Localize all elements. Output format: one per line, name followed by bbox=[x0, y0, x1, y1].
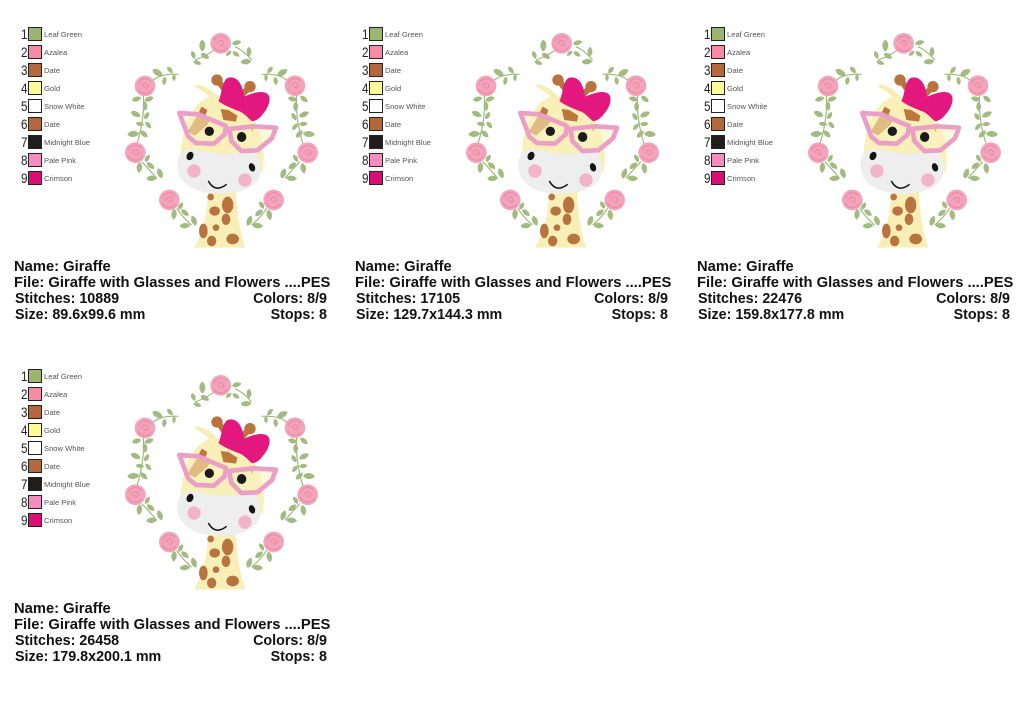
colour legend 2: 5 bbox=[362, 98, 369, 114]
design details 2: Stitches: 17105 bbox=[356, 291, 460, 307]
giraffe embroidery 4 bbox=[125, 375, 318, 590]
colour legend 2: 9 bbox=[362, 170, 369, 186]
design details 2: Name: Giraffe bbox=[355, 259, 452, 275]
colour legend 1: 4 bbox=[21, 80, 28, 96]
design details 4: Stops: 8 bbox=[271, 649, 327, 665]
colour legend 2: Date bbox=[385, 66, 401, 75]
colour legend 4: Leaf Green bbox=[44, 372, 82, 381]
colour legend 4: 5 bbox=[21, 440, 28, 456]
colour legend 2: Snow White bbox=[385, 102, 426, 111]
colour legend 1: Date bbox=[44, 66, 60, 75]
design details 1: File: Giraffe with Glasses and Flowers ....PES bbox=[14, 275, 331, 291]
panel: design 4 bbox=[14, 368, 331, 665]
colour legend 1 bbox=[21, 26, 90, 186]
colour legend 3: 4 bbox=[704, 80, 711, 96]
colour legend 1: Gold bbox=[44, 84, 60, 93]
colour legend 2: Crimson bbox=[385, 174, 413, 183]
colour legend 4: 2 bbox=[21, 386, 28, 402]
colour legend 4: Azalea bbox=[44, 390, 68, 399]
design details 4 bbox=[14, 601, 331, 665]
colour legend 3: 7 bbox=[704, 134, 711, 150]
design details 3: Colors: 8/9 bbox=[936, 291, 1010, 307]
colour legend 2: Date bbox=[385, 120, 401, 129]
design details 3: Size: 159.8x177.8 mm bbox=[698, 307, 844, 323]
design details 1: Stops: 8 bbox=[271, 307, 327, 323]
colour legend 4: 1 bbox=[21, 368, 28, 384]
colour legend 1: 5 bbox=[21, 98, 28, 114]
colour legend 1: Leaf Green bbox=[44, 30, 82, 39]
design details 2: Stops: 8 bbox=[612, 307, 668, 323]
colour legend 3: Pale Pink bbox=[727, 156, 759, 165]
colour legend 2: Azalea bbox=[385, 48, 409, 57]
design details 4: Stitches: 26458 bbox=[15, 633, 119, 649]
panel: design 2 bbox=[355, 26, 672, 323]
colour legend 2: Leaf Green bbox=[385, 30, 423, 39]
design details 1: Name: Giraffe bbox=[14, 259, 111, 275]
colour legend 3: Snow White bbox=[727, 102, 768, 111]
colour legend 4: Date bbox=[44, 462, 60, 471]
design details 1: Colors: 8/9 bbox=[253, 291, 327, 307]
panel: design 3 bbox=[697, 26, 1014, 323]
design details 4: Name: Giraffe bbox=[14, 601, 111, 617]
colour legend 3: 9 bbox=[704, 170, 711, 186]
colour legend 1: 3 bbox=[21, 62, 28, 78]
colour legend 1: Date bbox=[44, 120, 60, 129]
design details 3: File: Giraffe with Glasses and Flowers ....PES bbox=[697, 275, 1014, 291]
design details 2: Colors: 8/9 bbox=[594, 291, 668, 307]
colour legend 4: Snow White bbox=[44, 444, 85, 453]
colour legend 2: 1 bbox=[362, 26, 369, 42]
colour legend 4: 8 bbox=[21, 494, 28, 510]
giraffe embroidery 2 bbox=[466, 33, 659, 248]
design details 4: File: Giraffe with Glasses and Flowers ....PES bbox=[14, 617, 331, 633]
colour legend 2: 4 bbox=[362, 80, 369, 96]
colour legend 4 bbox=[21, 368, 90, 528]
colour legend 4: 7 bbox=[21, 476, 28, 492]
colour legend 1: Pale Pink bbox=[44, 156, 76, 165]
design details 3: Name: Giraffe bbox=[697, 259, 794, 275]
colour legend 4: 9 bbox=[21, 512, 28, 528]
design details 1 bbox=[14, 259, 331, 323]
colour legend 2 bbox=[362, 26, 431, 186]
design details 2: Size: 129.7x144.3 mm bbox=[356, 307, 502, 323]
design details 2 bbox=[355, 259, 672, 323]
colour legend 2: 7 bbox=[362, 134, 369, 150]
colour legend 4: Midnight Blue bbox=[44, 480, 90, 489]
colour legend 1: 7 bbox=[21, 134, 28, 150]
colour legend 1: Crimson bbox=[44, 174, 72, 183]
colour legend 1: Midnight Blue bbox=[44, 138, 90, 147]
design details 4: Colors: 8/9 bbox=[253, 633, 327, 649]
giraffe embroidery 3 bbox=[808, 33, 1001, 248]
design details 3: Stops: 8 bbox=[954, 307, 1010, 323]
colour legend 1: 1 bbox=[21, 26, 28, 42]
colour legend 3: Crimson bbox=[727, 174, 755, 183]
design details 4: Size: 179.8x200.1 mm bbox=[15, 649, 161, 665]
colour legend 1: Snow White bbox=[44, 102, 85, 111]
colour legend 3: Leaf Green bbox=[727, 30, 765, 39]
colour legend 4: Date bbox=[44, 408, 60, 417]
design details 3 bbox=[697, 259, 1014, 323]
colour legend 4: 6 bbox=[21, 458, 28, 474]
colour legend 3: 6 bbox=[704, 116, 711, 132]
colour legend 4: Crimson bbox=[44, 516, 72, 525]
colour legend 2: 6 bbox=[362, 116, 369, 132]
colour legend 1: Azalea bbox=[44, 48, 68, 57]
colour legend 2: 8 bbox=[362, 152, 369, 168]
giraffe embroidery 1 bbox=[125, 33, 318, 248]
colour legend 4: 4 bbox=[21, 422, 28, 438]
design details 3: Stitches: 22476 bbox=[698, 291, 802, 307]
colour legend 2: Midnight Blue bbox=[385, 138, 431, 147]
design details 2: File: Giraffe with Glasses and Flowers ....PES bbox=[355, 275, 672, 291]
colour legend 4: Gold bbox=[44, 426, 60, 435]
colour legend 3: Midnight Blue bbox=[727, 138, 773, 147]
colour legend 1: 8 bbox=[21, 152, 28, 168]
colour legend 1: 2 bbox=[21, 44, 28, 60]
colour legend 3: 5 bbox=[704, 98, 711, 114]
colour legend 3: 8 bbox=[704, 152, 711, 168]
colour legend 4: 3 bbox=[21, 404, 28, 420]
design details 1: Stitches: 10889 bbox=[15, 291, 119, 307]
colour legend 2: 2 bbox=[362, 44, 369, 60]
colour legend 4: Pale Pink bbox=[44, 498, 76, 507]
colour legend 1: 9 bbox=[21, 170, 28, 186]
colour legend 3 bbox=[704, 26, 773, 186]
colour legend 3: 3 bbox=[704, 62, 711, 78]
colour legend 3: Date bbox=[727, 120, 743, 129]
design details 1: Size: 89.6x99.6 mm bbox=[15, 307, 145, 323]
colour legend 3: Azalea bbox=[727, 48, 751, 57]
colour legend 2: Pale Pink bbox=[385, 156, 417, 165]
colour legend 1: 6 bbox=[21, 116, 28, 132]
colour legend 3: Gold bbox=[727, 84, 743, 93]
colour legend 2: Gold bbox=[385, 84, 401, 93]
colour legend 2: 3 bbox=[362, 62, 369, 78]
colour legend 3: 1 bbox=[704, 26, 711, 42]
colour legend 3: Date bbox=[727, 66, 743, 75]
colour legend 3: 2 bbox=[704, 44, 711, 60]
panel: design 1 bbox=[14, 26, 331, 323]
